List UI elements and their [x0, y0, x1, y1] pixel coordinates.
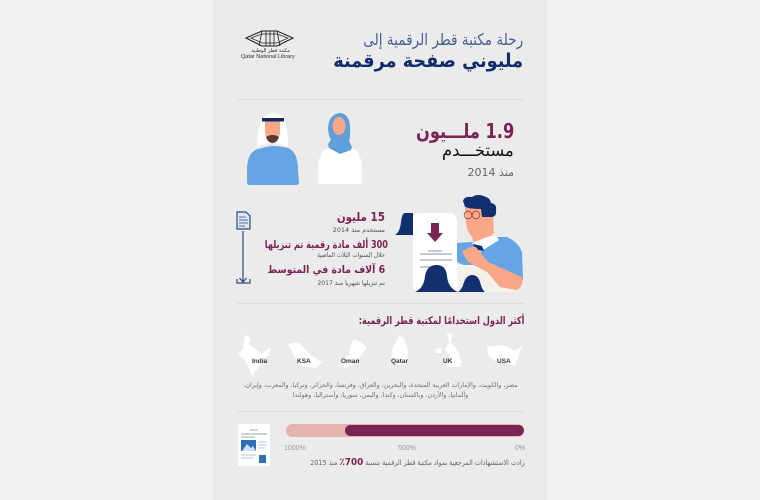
stat: 15 million: 15 مليون [337, 210, 385, 224]
axis label 1000%: 1000% [284, 445, 306, 452]
bar chart: citations [286, 424, 524, 437]
stat: 6 thousand: 6 آلاف مادة في المتوسط [267, 264, 385, 276]
stat caption: خلال السنوات الثلاث الماضية [317, 251, 385, 259]
label: KSA: KSA [297, 358, 311, 365]
label: Oman: Oman [341, 358, 359, 365]
axis label 0%: 0% [515, 445, 525, 452]
citation caption: زادت الاستشهادات المرجعية بمواد مكتبة قطر الرقمية بنسبة 700٪ منذ 2015 [310, 457, 525, 468]
title line 2: مليوني صفحة مرقمنة [333, 50, 523, 72]
panel: page background [213, 0, 547, 500]
logo text english: Qatar National Library [241, 54, 295, 60]
other countries text: مصر، والكويت، والإمارات العربية المتحدة، والبحرين، والعراق، وفرنسا، والجزائر، وتركيا، والمغرب، وإيران، [243, 382, 518, 389]
axis label 500%: 500% [398, 445, 416, 452]
logo text arabic: مكتبة قطر الوطنية [251, 48, 290, 54]
label: Qatar: Qatar [391, 358, 408, 365]
other countries text [243, 382, 518, 399]
since 2014: منذ 2014 [468, 166, 514, 179]
headline: users: مستخـــدم [442, 141, 514, 161]
stat caption: تم تنزيلها شهريا منذ 2017 [317, 279, 385, 287]
divider [237, 411, 524, 412]
stat caption: مستخدم منذ 2014 [333, 226, 385, 234]
divider [237, 99, 524, 100]
title line 1: رحلة مكتبة قطر الرقمية إلى [363, 30, 523, 49]
stat: 300 thousand: 300 ألف مادة رقمية تم تنزيلها [265, 239, 388, 251]
other countries text: وألمانيا، والأردن، وباكستان، وكندا، واليمن، سوريا، وأستراليا، وهولندا [293, 392, 468, 398]
label: USA: USA [497, 358, 511, 365]
divider [237, 303, 524, 304]
label: India: India [252, 358, 267, 365]
headline: 1.9 million: 1.9 ملـــيون [416, 119, 514, 143]
label: UK: UK [443, 358, 452, 365]
heading: top countries: أكثر الدول استخدامًا لمكتبة قطر الرقمية: [358, 315, 524, 327]
